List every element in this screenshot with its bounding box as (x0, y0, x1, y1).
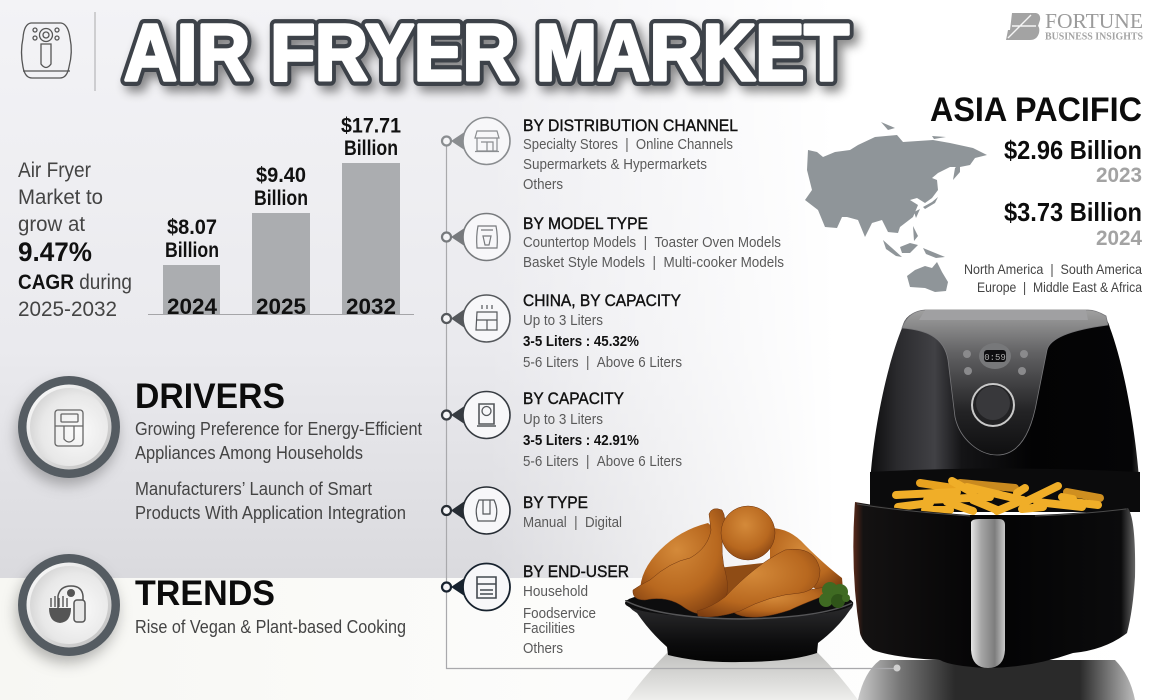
bar chart: 2032 (346, 294, 396, 319)
segment: by distribution channel: Specialty Stores | Online Channels (523, 137, 733, 153)
title: AIR FRYER MARKET (124, 8, 849, 97)
segment: by end-user: Foodservice (523, 606, 596, 622)
segment: by capacity: BY CAPACITY (523, 389, 624, 408)
connector dot (894, 664, 900, 672)
bar chart: 2025 (256, 294, 306, 319)
drivers text (135, 377, 422, 523)
trends text (135, 574, 406, 637)
bar chart: $8.07 (167, 216, 217, 239)
segment icon (442, 564, 510, 610)
fries (896, 481, 1100, 511)
segment icon (442, 392, 510, 438)
photo: fried chicken bowl (625, 506, 853, 662)
segment: by model type: Countertop Models | Toaster Oven Models (523, 235, 781, 251)
icon: drivers badge (18, 376, 120, 478)
segment: by distribution channel: Others (523, 177, 563, 193)
asia pacific stats: $2.96 Billion (1004, 135, 1142, 165)
segment: by capacity: 5-6 Liters | Above 6 Liters (523, 454, 682, 470)
segment: by type: Manual | Digital (523, 515, 622, 531)
asia pacific stats: 2023 (1096, 164, 1142, 187)
segment: by capacity (442, 389, 682, 470)
garnish (819, 582, 850, 608)
chicken (633, 506, 843, 617)
inner tray (870, 468, 1140, 512)
text block: market growth: CAGR during (18, 271, 132, 294)
segment: by type: BY TYPE (523, 493, 588, 512)
logo: Fortune Business Insights: BUSINESS INSIGHTS (1045, 32, 1143, 42)
display (963, 343, 1028, 375)
bar chart: Billion (254, 187, 308, 210)
lid (919, 310, 1088, 320)
segment: by distribution channel (442, 116, 738, 193)
icon: air fryer outline (22, 23, 71, 78)
segment: china, by capacity: 3-5 Liters : 45.32% (523, 334, 639, 350)
segment: by distribution channel: Supermarkets & Hypermarkets (523, 157, 707, 173)
text block: market growth: Market to (18, 186, 103, 209)
bar chart: Billion (344, 137, 398, 160)
asia pacific stats: North America | South America (964, 261, 1142, 277)
segment: by distribution channel: BY DISTRIBUTION CHANNEL (523, 116, 738, 135)
segment: by model type: BY MODEL TYPE (523, 214, 648, 233)
control panel (902, 310, 1108, 455)
bar chart (148, 114, 414, 319)
segment: by model type (442, 214, 784, 271)
segment: by capacity: Up to 3 Liters (523, 412, 603, 428)
segment: by end-user: Facilities (523, 621, 575, 637)
segment: by end-user: Others (523, 641, 563, 657)
segment: by end-user (442, 562, 629, 657)
drivers text: Manufacturers’ Launch of Smart (135, 479, 372, 499)
segment: by end-user: Household (523, 584, 588, 600)
drivers text: Growing Preference for Energy-Efficient (135, 419, 422, 439)
trends text: Rise of Vegan & Plant-based Cooking (135, 617, 406, 637)
asia pacific stats: $3.73 Billion (1004, 197, 1142, 227)
segment: china, by capacity: 5-6 Liters | Above 6 Liters (523, 355, 682, 371)
segment: china, by capacity: CHINA, BY CAPACITY (523, 291, 681, 310)
bar chart: $9.40 (256, 164, 306, 187)
asia pacific stats: ASIA PACIFIC (930, 91, 1142, 129)
handle (971, 519, 1005, 668)
fryer basket (853, 502, 1135, 668)
asia pacific stats (930, 91, 1142, 295)
display: 0:59 (984, 353, 1006, 363)
trends text: TRENDS (135, 574, 275, 613)
map: Asia Pacific (805, 122, 987, 292)
segment icon (442, 487, 510, 534)
connector line (446, 141, 897, 668)
bowl (625, 588, 853, 662)
segment: by model type: Basket Style Models | Multi-cooker Models (523, 255, 784, 271)
segment icon (442, 118, 510, 164)
icon: trends badge (18, 554, 120, 656)
text block: market growth: Air Fryer (18, 159, 91, 182)
text block: market growth: 9.47% (18, 237, 92, 267)
logo: Fortune Business Insights (1006, 9, 1143, 42)
segment icon (442, 295, 510, 342)
asia pacific stats: 2024 (1096, 227, 1142, 250)
bar chart: 2024 (167, 294, 218, 319)
segment icon (442, 214, 510, 260)
segment: by end-user: BY END-USER (523, 562, 629, 581)
segment: china, by capacity: Up to 3 Liters (523, 313, 603, 329)
photo: air fryer and bowl reflections (627, 652, 1135, 700)
segment: by type (442, 487, 622, 534)
knob (972, 384, 1014, 426)
photo: air fryer (853, 310, 1140, 672)
drivers text: Appliances Among Households (135, 443, 363, 463)
logo: Fortune Business Insights: FORTUNE (1045, 9, 1143, 33)
title: AIR FRYER MARKET (124, 8, 849, 97)
text block: market growth: grow at (18, 213, 85, 236)
segment: china, by capacity (442, 291, 682, 371)
drivers text: DRIVERS (135, 377, 285, 416)
bar chart: $17.71 (341, 114, 401, 138)
fryer body (870, 310, 1140, 505)
drivers text: Products With Application Integration (135, 503, 406, 523)
segment: by capacity: 3-5 Liters : 42.91% (523, 433, 639, 449)
divider (94, 12, 96, 91)
bar chart: Billion (165, 239, 219, 262)
text block: market growth: 2025-2032 (18, 298, 117, 321)
text block: market growth (18, 159, 132, 321)
